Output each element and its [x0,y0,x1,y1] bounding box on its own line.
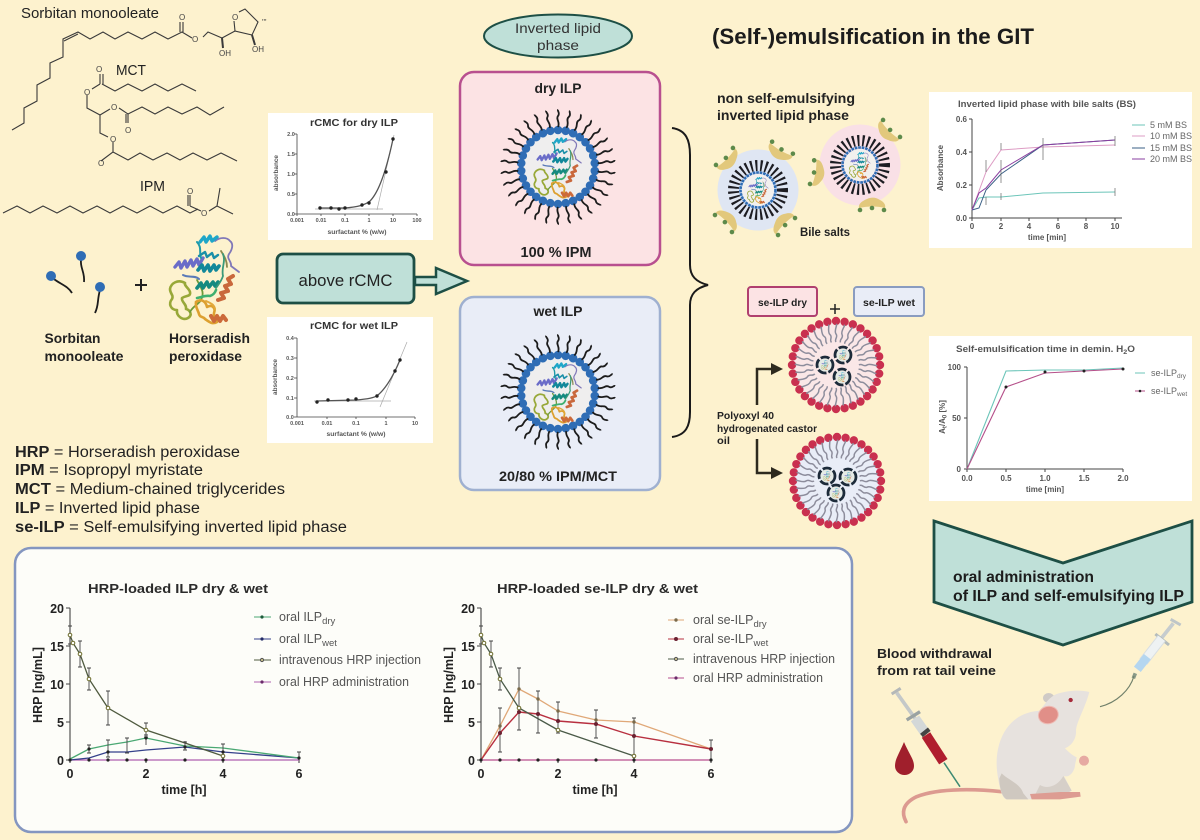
chart: self-emulsification time: se-ILP [1151,386,1177,396]
arrow: above rCMC to ILP [415,268,467,294]
panel: dry ILP: dry ILP [534,80,582,96]
chart: HRP-loaded se-ILP dry and wet: 2 [555,767,562,781]
chart: rCMC for wet ILP: 0.01 [322,421,332,427]
chart: self-emulsification time: 0 [957,465,962,474]
chart: HRP-loaded ILP dry and wet: 6 [296,767,303,781]
chart: inverted lipid phase with bile salts: 0.4 [956,148,968,157]
label: sorbitan monooleate: monooleate [44,349,124,364]
panel: wet ILP: 20/80 % IPM/MCT [499,468,617,484]
chart: rCMC for dry ILP: 0.5 [287,192,295,198]
chart: self-emulsification time: 50 [952,414,962,423]
chart: inverted lipid phase with bile salts: 20 mM BS [1150,154,1192,164]
chart: self-emulsification time: t [942,426,948,428]
legend: se-ILP chart [668,613,835,685]
panel: wet ILP: wet ILP [533,303,582,319]
chart: HRP-loaded ILP dry and wet: 20 [50,602,64,616]
chart: HRP-loaded se-ILP dry and wet: 6 [708,767,715,781]
chart: self-emulsification time: dry [1177,373,1187,380]
molecule: MCT: O [125,126,131,135]
glossary of abbreviations: HRP = Horseradish peroxidase [15,444,240,461]
chart: self-emulsification time: wet [1176,391,1187,398]
chart: self-emulsification time: 1.0 [1039,474,1051,483]
chart: rCMC for dry ILP: surfactant % (w/w) [328,230,386,236]
chart: inverted lipid phase with bile salts: 5 mM BS [1150,120,1187,130]
chart: inverted lipid phase with bile salts: Inverted lipid phase with bile salts (BS) [958,99,1136,109]
icon: blood drop [895,742,914,775]
legend: ILP chart: oral ILP [279,632,322,646]
chart: self-emulsification time: A [938,428,947,434]
chart: inverted lipid phase with bile salts: Absorbance [936,144,945,191]
label: polyoxyl 40 hydrogenated castor oil: Polyoxyl 40 [717,410,774,422]
label: se-ILP dry: se-ILP dry [758,297,807,309]
chart: rCMC for wet ILP: rCMC for wet ILP [310,321,398,332]
icon: oral syringe [1100,619,1181,707]
chart: rCMC for wet ILP: 0.2 [286,376,294,382]
chart: HRP-loaded ILP dry and wet: 5 [57,716,64,730]
chart: HRP-loaded ILP dry and wet: 0 [57,754,64,768]
panel: dry ILP: 100 % IPM [520,245,592,261]
glossary of abbreviations: IPM = Isopropyl myristate [15,462,203,479]
chart: rCMC for wet ILP: 1 [384,421,388,427]
chart: self-emulsification time: 2 [1123,349,1128,356]
chart: rCMC for wet ILP: surfactant % (w/w) [326,432,386,438]
chart: inverted lipid phase with bile salts: 8 [1084,222,1089,231]
chart: rCMC for wet ILP: 0.4 [286,336,295,342]
chart: rCMC for wet ILP: 0.001 [290,421,304,427]
chart: rCMC for dry ILP: 0.001 [290,218,304,224]
icon: blood syringe [892,688,960,787]
chart: HRP-loaded ILP dry and wet: HRP [ng/mL] [31,647,45,723]
chart: HRP-loaded se-ILP dry and wet: 15 [461,640,475,654]
chart: inverted lipid phase with bile salts: 10 mM BS [1150,131,1192,141]
chart: rCMC for dry ILP: 1.0 [287,172,295,178]
chart: inverted lipid phase with bile salts: 10 [1111,222,1120,231]
callout: above rCMC [277,254,414,303]
chart: inverted lipid phase with bile salts: 0.2 [956,181,968,190]
chart: inverted lipid phase with bile salts: 2 [999,222,1004,231]
chart: self-emulsification time [929,336,1192,501]
chart: self-emulsification time: 100 [948,363,962,372]
chart: rCMC for dry ILP: 2.0 [287,132,295,138]
chart: HRP-loaded ILP dry and wet: time [h] [162,783,206,797]
chart: self-emulsification time: 0.5 [1000,474,1012,483]
molecule: MCT: O [96,65,102,74]
chart: HRP-loaded ILP dry and wet: 2 [143,767,150,781]
chart: inverted lipid phase with bile salts: 0.0 [956,214,968,223]
chart: self-emulsification time: [%] [938,400,947,415]
chart: rCMC for dry ILP: 0.0 [287,212,295,218]
molecule: sorbitan monooleate: OH [252,45,264,54]
chart: inverted lipid phase with bile salts: 15 mM BS [1150,143,1192,153]
panel: wet ILP [460,297,660,490]
chart: rCMC for wet ILP: 0.1 [352,421,360,427]
chart: inverted lipid phase with bile salts: 4 [1027,222,1032,231]
molecule: sorbitan monooleate: O [179,13,185,22]
legend: ILP chart: wet [321,638,337,649]
chart: self-emulsification time: 0.0 [961,474,973,483]
legend: ILP chart: oral ILP [279,610,322,624]
label: horseradish peroxidase: peroxidase [169,349,242,364]
molecule: sorbitan monooleate: OH [219,49,231,58]
chart: HRP-loaded se-ILP dry and wet: 4 [631,767,638,781]
chart: HRP-loaded se-ILP dry and wet: 20 [461,602,475,616]
chart: HRP-loaded se-ILP dry and wet [442,581,715,797]
arrow: polyoxyl to se-ILP wet [757,439,783,479]
label: horseradish peroxidase [169,331,250,364]
panel: pharmacokinetic charts [15,548,852,832]
curly brace [672,128,708,437]
label: blood withdrawal: from rat tail veine [877,663,996,678]
icon: dry ILP micelle [500,110,616,224]
arrow: oral administration chevron: oral administration [953,569,1094,586]
callout: above rCMC: above rCMC [298,271,392,290]
chart: rCMC for dry ILP: 0.1 [341,218,349,224]
chart: self-emulsification time: time [min] [1026,485,1064,494]
chart: rCMC for wet ILP: 10 [412,421,418,427]
chart: rCMC for wet ILP: 0.1 [286,396,294,402]
legend: se-ILP chart: oral se-ILP [693,613,753,627]
legend: se-ILP chart: oral HRP administration [693,671,823,685]
chart: self-emulsification time: 0 [942,414,948,418]
icon: dry ILP droplet with bile salts [807,117,903,212]
panel: dry ILP [460,72,660,265]
chart: HRP-loaded se-ILP dry and wet: time [h] [572,783,618,797]
chart: self-emulsification time: O [1127,344,1135,354]
molecule: sorbitan monooleate: Sorbitan monooleate [21,5,159,22]
chart: inverted lipid phase with bile salts: 0.6 [956,115,968,124]
label: se-ILP dry [748,287,817,316]
label: blood withdrawal: Blood withdrawal [877,646,992,661]
legend: ILP chart: dry [322,616,336,627]
oval: inverted lipid phase: Inverted lipid [515,20,601,36]
legend: se-ILP chart: intravenous HRP injection [693,652,835,666]
oval: inverted lipid phase: phase [537,37,579,53]
chart: self-emulsification time: Self-emulsification time in demin. H [956,344,1108,354]
chart: rCMC for dry ILP: 100 [412,218,422,224]
label: sorbitan monooleate: Sorbitan [44,331,100,346]
glossary of abbreviations: se-ILP = Self-emulsifying inverted lipid phase [15,519,347,536]
chart: HRP-loaded se-ILP dry and wet: 0 [478,767,485,781]
chart: rCMC for wet ILP: absorbance [273,358,279,395]
chart: HRP-loaded ILP dry and wet: HRP-loaded ILP dry & wet [88,581,269,596]
molecule: IPM: IPM [140,179,165,195]
chart: rCMC for dry ILP: 1 [367,218,371,224]
chart: self-emulsification time: se-ILP [1151,368,1177,378]
label: non self-emulsifying inverted lipid phase: inverted lipid phase [717,107,849,123]
icon: wet ILP micelle [500,334,616,450]
chart: HRP-loaded ILP dry and wet [31,581,303,797]
label: se-ILP wet: se-ILP wet [863,297,915,309]
icon: se-ILP wet droplet [787,431,887,531]
chart: rCMC for dry ILP: rCMC for dry ILP [310,118,398,129]
plus sign [830,304,840,314]
chart: rCMC for wet ILP [267,317,433,443]
chart: HRP-loaded se-ILP dry and wet: 10 [461,678,475,692]
arrow: oral administration chevron [934,521,1192,645]
plus sign [135,279,147,291]
chart: HRP-loaded se-ILP dry and wet: 0 [468,754,475,768]
chart: rCMC for dry ILP: absorbance [274,154,280,191]
molecule: sorbitan monooleate: O [232,13,238,22]
chart: inverted lipid phase with bile salts: 0 [970,222,975,231]
glossary of abbreviations: MCT = Medium-chained triglycerides [15,481,285,498]
arrow: oral administration chevron: of ILP and self-emulsifying ILP [953,588,1184,605]
molecule: MCT [84,63,237,168]
molecule: MCT: O [98,159,104,168]
label: non self-emulsifying inverted lipid phase: non self-emulsifying [717,90,855,106]
molecule: sorbitan monooleate: O [192,35,198,44]
chart: rCMC for wet ILP: 0.0 [286,415,294,421]
chart: HRP-loaded ILP dry and wet: 4 [220,767,227,781]
chart: rCMC for wet ILP: 0.3 [286,356,294,362]
label: blood withdrawal [877,646,996,678]
chart: self-emulsification time: 2.0 [1117,474,1129,483]
chart: self-emulsification time: /A [938,418,947,426]
chart: rCMC for dry ILP: 10 [390,218,396,224]
legend: se-ILP chart: dry [753,619,767,630]
chart: self-emulsification time: 1.5 [1078,474,1090,483]
icon: wet ILP droplet with bile salts [712,139,798,238]
legend: ILP chart: intravenous HRP injection [279,653,421,667]
chart: HRP-loaded ILP dry and wet: 0 [67,767,74,781]
label: se-ILP wet [854,287,924,316]
oval: inverted lipid phase [484,14,632,58]
glossary of abbreviations [15,444,347,536]
chart: inverted lipid phase with bile salts [929,92,1192,248]
molecule: MCT: O [111,103,117,112]
icon: rat [904,691,1089,822]
legend: ILP chart [254,610,421,689]
molecule: sorbitan monooleate [12,5,267,130]
chart: HRP-loaded se-ILP dry and wet: HRP-loaded se-ILP dry & wet [497,581,699,596]
label: bile salts: Bile salts [800,227,850,239]
chart: inverted lipid phase with bile salts: 6 [1056,222,1061,231]
icon: sorbitan monooleate molecules [46,251,105,313]
icon: se-ILP dry droplet [786,315,886,415]
molecule: MCT: MCT [116,63,146,79]
legend: se-ILP chart: wet [752,638,769,649]
molecule: MCT: O [84,88,90,97]
label: sorbitan monooleate [44,331,124,364]
label: polyoxyl 40 hydrogenated castor oil: oil [717,435,730,447]
heading: self-emulsification in the GIT: (Self-)emulsification in the GIT [712,24,1035,49]
chart: HRP-loaded ILP dry and wet: 10 [50,678,64,692]
chart: rCMC for dry ILP: 1.5 [287,152,295,158]
chart: HRP-loaded ILP dry and wet: 15 [50,640,64,654]
molecule: IPM: O [201,209,207,218]
label: polyoxyl 40 hydrogenated castor oil: hydrogenated castor [717,423,817,435]
label: non self-emulsifying inverted lipid phase [717,90,855,123]
legend: se-ILP chart: oral se-ILP [693,632,753,646]
glossary of abbreviations: ILP = Inverted lipid phase [15,500,200,517]
molecule: IPM: O [187,187,193,196]
chart: HRP-loaded se-ILP dry and wet: HRP [ng/mL] [442,647,456,723]
chart: rCMC for dry ILP: 0.01 [316,218,326,224]
chart: HRP-loaded se-ILP dry and wet: 5 [468,716,475,730]
label: polyoxyl 40 hydrogenated castor oil [717,410,817,447]
icon: horseradish peroxidase protein [170,236,239,323]
legend: ILP chart: oral HRP administration [279,675,409,689]
molecule: MCT: O [110,135,116,144]
arrow: polyoxyl to se-ILP dry [757,363,783,405]
label: horseradish peroxidase: Horseradish [169,331,250,346]
molecule: IPM [3,179,233,218]
chart: inverted lipid phase with bile salts: time [min] [1028,233,1066,242]
molecule: sorbitan monooleate: ''' [262,18,267,27]
chart: rCMC for dry ILP [268,113,433,240]
